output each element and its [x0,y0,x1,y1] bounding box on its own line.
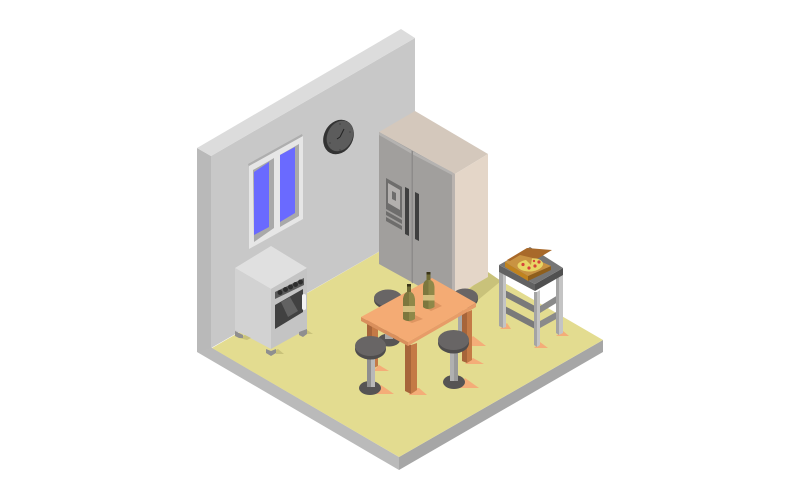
table legs [367,310,472,394]
side rack [499,247,563,347]
floor base and slab [197,231,603,470]
pizza [518,258,543,272]
stove control panel [275,278,304,299]
stove feet [235,329,313,356]
wall clock [317,114,360,160]
back left stool [374,290,402,346]
rack shadows on floor [500,323,569,348]
table and stools shadows on floor [372,336,486,395]
table top [361,278,476,346]
rack top [499,247,563,291]
oven door [275,289,306,329]
fridge dispenser panel [386,178,402,230]
back right stool [452,288,478,340]
rack legs [499,272,563,347]
front right stool [438,330,469,389]
back wall [197,29,415,352]
window [248,134,303,249]
wine bottle front [403,284,415,321]
fridge handles [405,187,419,241]
fridge shadow on floor [462,272,501,300]
stove [235,246,313,356]
bottle shadows on table [405,301,442,323]
refrigerator [379,111,488,306]
wine bottle back [423,272,434,309]
pizza box [505,248,552,281]
front left stool [355,336,386,395]
rack shelf rails [503,289,558,329]
